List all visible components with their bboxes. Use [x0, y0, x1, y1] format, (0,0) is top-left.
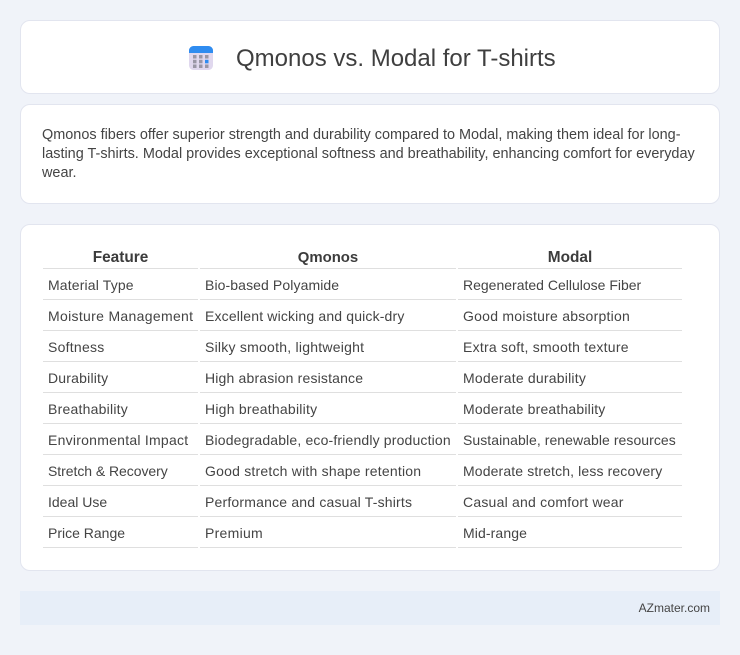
row: Moisture Management: Moisture Management [48, 308, 193, 324]
row: Softness: Silky smooth, lightweight [205, 339, 364, 355]
description text: wear. [42, 165, 77, 181]
icon: calendar [189, 46, 213, 70]
row: Stretch & Recovery: Stretch & Recovery [48, 463, 168, 479]
row: Softness [48, 339, 629, 355]
row: Breathability [48, 401, 606, 417]
row: Ideal Use: Performance and casual T-shirts [205, 494, 412, 510]
row: Material Type: Bio-based Polyamide [205, 277, 339, 293]
row: Moisture Management: Good moisture absorption [463, 308, 630, 324]
row: Environmental Impact: Environmental Impact [48, 432, 188, 448]
table header: Modal: Modal [548, 249, 592, 266]
row: Softness: Extra soft, smooth texture [463, 339, 629, 355]
row: Environmental Impact [48, 432, 676, 448]
table header: Qmonos: Qmonos [298, 250, 358, 266]
row: Stretch & Recovery: Good stretch with shape retention [205, 463, 421, 479]
row: Moisture Management [48, 308, 630, 324]
row: Environmental Impact: Biodegradable, eco-friendly production [205, 432, 451, 448]
row: Durability: Durability [48, 370, 108, 386]
row: Breathability: Moderate breathability [463, 401, 605, 417]
row: Environmental Impact: Sustainable, renewable resources [463, 432, 676, 448]
row: Price Range: Price Range [48, 525, 125, 541]
table header: Feature: Feature [93, 249, 148, 266]
row: Breathability: High breathability [205, 401, 317, 417]
row: Durability: High abrasion resistance [205, 370, 363, 386]
description text: lasting T-shirts. Modal provides exceptional softness and breathability, enhancing comfort for everyday [42, 146, 695, 162]
row: Material Type: Regenerated Cellulose Fiber [463, 277, 641, 293]
row: Moisture Management: Excellent wicking and quick-dry [205, 308, 404, 324]
title: Qmonos vs. Modal for T-shirts [236, 45, 556, 72]
row: Ideal Use [48, 494, 624, 510]
description text: Qmonos fibers offer superior strength and durability compared to Modal, making them ideal for long- [42, 127, 681, 143]
panel: description [20, 104, 720, 204]
row: Material Type: Material Type [48, 277, 134, 293]
row: Stretch & Recovery [48, 463, 662, 479]
row: Price Range [48, 525, 527, 541]
row: Durability: Moderate durability [463, 370, 586, 386]
row: Softness: Softness [48, 339, 104, 355]
footer credit: AZmater.com [639, 601, 710, 615]
row: Material Type [48, 277, 641, 293]
row: Ideal Use: Ideal Use [48, 494, 107, 510]
footer bar [20, 591, 720, 625]
description text [42, 127, 695, 181]
panel: comparison table [20, 224, 720, 571]
row: Ideal Use: Casual and comfort wear [463, 494, 624, 510]
row: Breathability: Breathability [48, 401, 128, 417]
panel: title card [20, 20, 720, 94]
row: Price Range: Premium [205, 525, 263, 541]
row: Stretch & Recovery: Moderate stretch, less recovery [463, 463, 662, 479]
row: Durability [48, 370, 586, 386]
row: Price Range: Mid-range [463, 525, 527, 541]
